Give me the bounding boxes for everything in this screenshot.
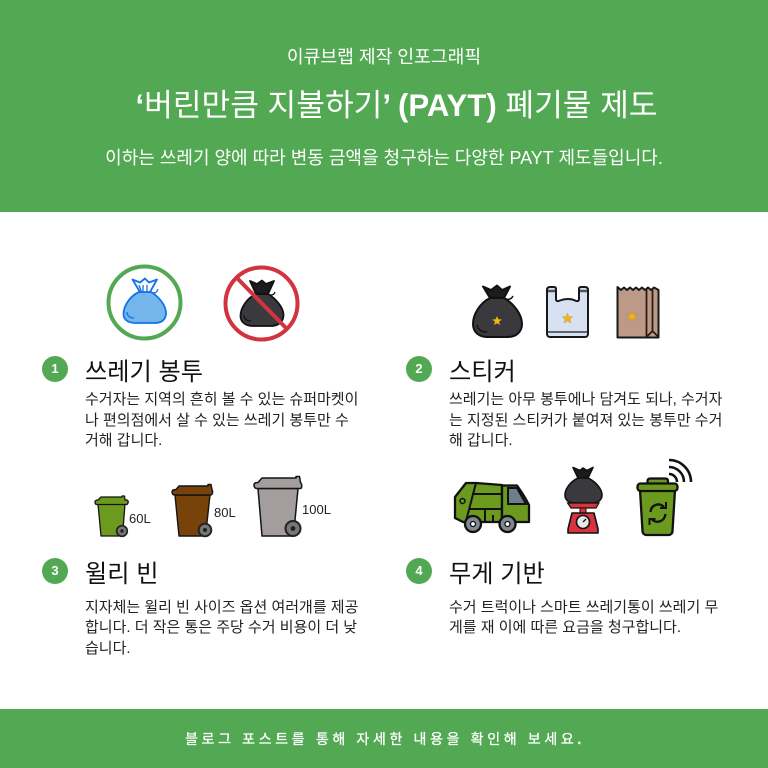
text block 1: 거해 갑니다.: [85, 432, 162, 449]
icon: smart bin with signal: [638, 460, 691, 535]
heading 4: 무게 기반: [449, 561, 545, 588]
icon: paper bag with star: [618, 287, 658, 338]
number badge 3: [42, 558, 68, 584]
text block 4: [449, 598, 718, 636]
text block 1: [85, 391, 358, 449]
subtitle: 이하는 쓰레기 양에 따라 변동 금액을 청구하는 다양한 PAYT 제도들입니다.: [105, 148, 663, 168]
text block 1: 나 편의점에서 살 수 있는 쓰레기 봉투만 수: [85, 412, 349, 429]
icon: 60L green bin: [95, 496, 128, 536]
number badge 2: [406, 356, 432, 382]
number badge 3: 3: [51, 563, 59, 578]
text block 2: [449, 391, 722, 449]
header kicker: 이큐브랩 제작 인포그래픽: [287, 47, 481, 67]
text block 1: 수거자는 지역의 흔히 볼 수 있는 슈퍼마켓이: [85, 391, 358, 408]
text block 3: 습니다.: [85, 640, 131, 657]
bin label 80L: 80L: [214, 505, 236, 520]
number badge 1: 1: [51, 361, 59, 376]
icon: 80L brown bin: [172, 484, 213, 536]
heading 2: 스티커: [449, 359, 516, 386]
number badge 4: [406, 558, 432, 584]
icon: black bag with star: [473, 286, 522, 337]
heading 1: 쓰레기 봉투: [85, 359, 203, 386]
number badge 4: 4: [415, 563, 423, 578]
header banner: [0, 0, 768, 212]
footer banner: [0, 709, 768, 768]
text block 3: [85, 598, 358, 657]
heading 3: 윌리 빈: [85, 561, 158, 588]
icon: garbage truck: [455, 483, 529, 532]
bin label 60L: 60L: [129, 511, 151, 526]
text block 4: 수거 트럭이나 스마트 쓰레기통이 쓰레기 무: [449, 598, 718, 616]
footer text: 블로그 포스트를 통해 자세한 내용을 확인해 보세요.: [185, 731, 585, 747]
title: ‘버린만큼 지불하기’ (PAYT) 폐기물 제도: [135, 88, 658, 123]
icon: 100L grey bin: [254, 476, 302, 536]
text block 2: 해 갑니다.: [449, 432, 513, 449]
text block 4: 게를 재 이에 따른 요금을 청구합니다.: [449, 619, 681, 636]
text block 3: 지자체는 윌리 빈 사이즈 옵션 여러개를 제공: [85, 598, 358, 616]
icon: banned black bag: [226, 268, 298, 340]
icon: allowed blue bag: [108, 266, 180, 338]
text block 3: 합니다. 더 작은 통은 주당 수거 비용이 더 낮: [85, 619, 357, 636]
bin label 100L: 100L: [302, 502, 331, 517]
text block 2: 는 지정된 스티커가 붙여져 있는 봉투만 수거: [449, 412, 722, 429]
text block 2: 쓰레기는 아무 봉투에나 담겨도 되나, 수거자: [449, 391, 722, 408]
number badge 2: 2: [415, 361, 423, 376]
icon: bag on red scale: [565, 468, 602, 533]
number badge 1: [42, 356, 68, 382]
icon: plastic bag with star: [547, 287, 588, 337]
